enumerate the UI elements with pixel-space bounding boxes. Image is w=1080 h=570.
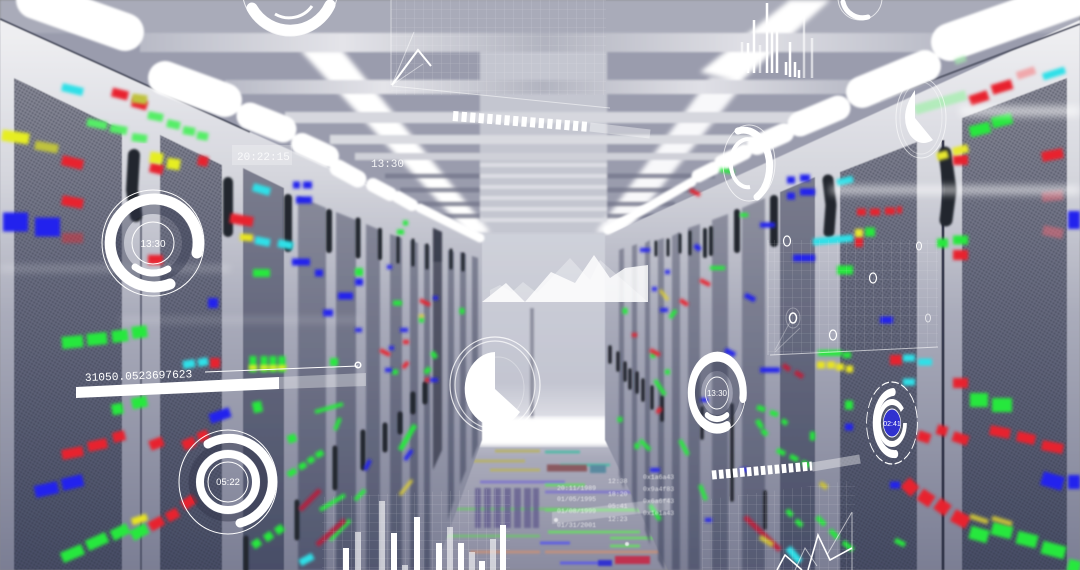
far wall and floor [432, 233, 668, 570]
gauge: 13:30 left: 13:30 [140, 239, 166, 250]
line chart with grid: lower right [702, 480, 855, 570]
gauge: 13:30 left [102, 190, 204, 296]
ceiling [0, 0, 1080, 240]
date and hex data table: bottom centre: 0x1e1a43 [643, 510, 674, 517]
server status LEDs: pale green under lamp glare [87, 58, 966, 139]
gauge: 13:30 right [689, 354, 745, 432]
lens glare streaks [0, 106, 1080, 322]
left far cabinets [298, 196, 478, 570]
server status LEDs: red [62, 70, 1063, 550]
gauge: 02:41 with blue core: 02:41 [883, 421, 901, 428]
date and hex data table: bottom centre: 20:11/1989 [557, 485, 596, 492]
dashed progress bar: top centre [453, 116, 650, 134]
floor reflections [445, 451, 660, 563]
grid panel with target markers: right [768, 236, 938, 355]
gauge: 02:41 with blue core [867, 382, 917, 464]
data readout with progress bar: 31050.0523697623 [85, 369, 192, 385]
date and hex data table: bottom centre: 0x9a4f83 [643, 486, 674, 493]
date and hex data table: bottom centre: 0x6a6f43 [643, 498, 674, 505]
date and hex data table: bottom centre: 01/05/1995 [557, 496, 596, 503]
door handles [132, 153, 950, 570]
timestamp labels: 20:22:15 [237, 152, 290, 164]
date and hex data table: bottom centre: 01/08/1999 [557, 508, 596, 515]
data readout with progress bar [76, 362, 366, 398]
left server rack wall [0, 19, 482, 570]
date and hex data table: bottom centre: 05:41 [608, 503, 628, 510]
grid panel: top centre [391, 0, 606, 95]
dashed progress bar: lower right [712, 459, 860, 475]
date and hex data table: bottom centre: 18:20 [608, 491, 628, 498]
line chart: top centre [391, 0, 610, 108]
gauge: upper right [723, 125, 775, 201]
timestamp labels: 13:30 [371, 159, 404, 171]
pie chart: centre [450, 337, 540, 433]
bar chart with grid: bottom left [322, 488, 510, 570]
gauge: 13:30 right: 13:30 [707, 389, 728, 398]
floor light pool [478, 417, 610, 446]
timestamp labels [232, 145, 404, 171]
gauge: 05:22 [179, 430, 277, 534]
server status LEDs: green [62, 118, 1080, 568]
gauge: 05:22: 05:22 [216, 477, 240, 488]
date and hex data table: bottom centre: 12:23 [608, 516, 628, 523]
right server rack wall [605, 20, 1080, 570]
date and hex data table: bottom centre: 01/31/2001 [557, 522, 596, 529]
overhead lamp housings [35, 0, 1080, 238]
right far cabinets [619, 198, 765, 570]
area chart: centre [482, 255, 648, 302]
gauge: top left cropped [242, 0, 338, 36]
date and hex data table: bottom centre: 12:38 [608, 478, 628, 485]
bar chart: top right [742, 3, 812, 78]
date and hex data table: bottom centre: 0x1a6a43 [643, 474, 674, 481]
date and hex data table: bottom centre [552, 474, 674, 546]
server status LEDs: blue [3, 178, 1080, 520]
pie chart: upper right [896, 78, 946, 158]
gauge: top right cropped [838, 0, 882, 20]
